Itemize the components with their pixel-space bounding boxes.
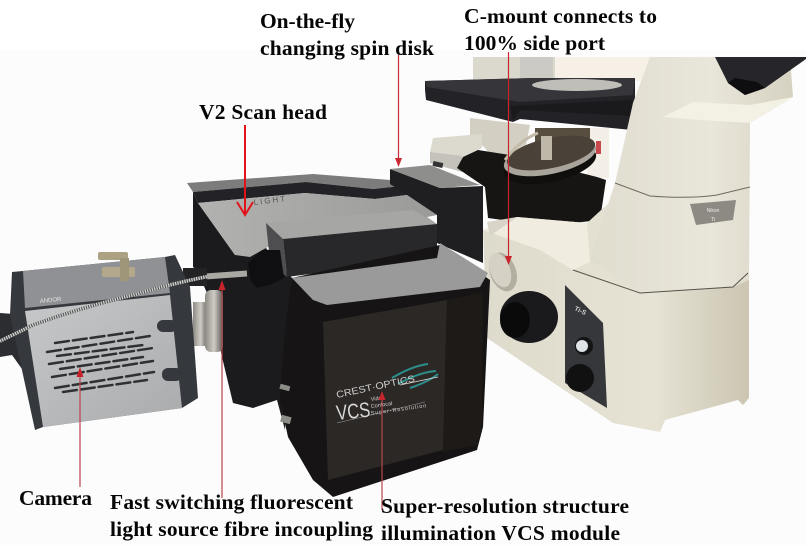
objective turret block: [457, 128, 606, 226]
camera lens adapter: [183, 268, 223, 352]
VCS logo: [335, 364, 438, 425]
scan head logo: LIGHT: [253, 194, 288, 207]
arrow: VCS module: [378, 391, 386, 510]
microscope upper body: [573, 57, 793, 293]
module front panel: [323, 300, 447, 480]
arrow: fibre incoupling: [218, 280, 226, 498]
VCS logo: CREST·OPTICS: [335, 374, 416, 401]
label: On-the-fly changing spin disk: On-the-fly: [260, 9, 355, 33]
arrow: camera: [76, 367, 84, 487]
label: Super-resolution structure illumination VCS module: illumination VCS module: [381, 521, 620, 545]
microscope: [425, 57, 806, 432]
module body: [280, 245, 490, 497]
VCS module: [279, 243, 490, 497]
label: C-mount connects to 100% side port: C-mount connects to: [464, 4, 657, 28]
camera side grooves: [157, 320, 182, 381]
camera top face: [23, 257, 170, 308]
label: Fast switching fluorescent light source fibre incoupling: [110, 490, 373, 541]
module side screws: [279, 384, 292, 424]
focus knob: [500, 291, 558, 343]
module side strip: [443, 292, 483, 452]
scan head top plate: [198, 193, 437, 257]
arrow: C-mount: [505, 52, 512, 265]
label: C-mount connects to 100% side port: [464, 4, 657, 55]
fibre connector knob: [248, 250, 284, 288]
eyepiece: [715, 57, 806, 95]
label: C-mount connects to 100% side port: 100% side port: [464, 31, 606, 55]
microscope base: [483, 188, 749, 432]
arrow: V2 scan head: [237, 125, 253, 215]
camera: [0, 252, 223, 430]
on-the-fly spin disk block: [390, 165, 483, 263]
scan head body: [193, 192, 292, 430]
side port ring: [484, 249, 522, 295]
VCS logo: VCS: [335, 399, 371, 425]
module top face: [292, 243, 488, 305]
label: Super-resolution structure illumination VCS module: [381, 494, 629, 545]
label: On-the-fly changing spin disk: [260, 9, 434, 60]
camera front panel: [25, 295, 182, 427]
camera connectors: [98, 252, 135, 281]
label: Super-resolution structure illumination VCS module: Super-resolution structure: [381, 494, 629, 518]
label: Fast switching fluorescent light source fibre incoupling: Fast switching fluorescent: [110, 490, 354, 514]
arrow: spin disk: [395, 55, 402, 167]
microscope stage: [425, 78, 635, 130]
label: V2 Scan head: V2 Scan head: [199, 100, 327, 124]
microscope left arm: [430, 134, 482, 172]
camera vent slots: [47, 332, 154, 392]
fibre cable: [0, 271, 247, 341]
scan head top rim: [187, 174, 402, 192]
camera rear stub: [0, 313, 22, 369]
VCS logo: Confocal: [370, 401, 393, 410]
camera body: [10, 255, 198, 430]
VCS logo: Video: [370, 395, 385, 403]
Nikon badge: Nikon: [707, 208, 720, 214]
scan head: [187, 174, 437, 430]
VCS logo: Super-Resolution: [370, 403, 427, 417]
camera logo: ANDOR: [40, 297, 62, 305]
Nikon badge: Ti: [711, 217, 715, 223]
label: Camera: Camera: [19, 486, 92, 510]
scan head upper block: [266, 210, 437, 277]
label: On-the-fly changing spin disk: changing spin disk: [260, 36, 434, 60]
label: Fast switching fluorescent light source fibre incoupling: light source fibre incoupling: [110, 517, 373, 541]
control panel: [565, 285, 607, 408]
Nikon badge: [690, 200, 736, 225]
microscope rear column: [470, 57, 655, 178]
control panel: Ti-S: [573, 305, 588, 317]
